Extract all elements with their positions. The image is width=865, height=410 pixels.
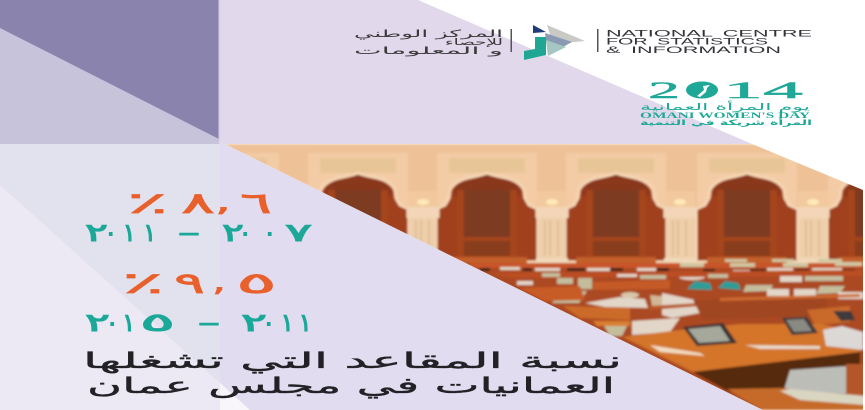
lower desk [727,388,865,410]
Omani Women's Day 2014 badge: يوم المرأة العمانية [640,100,811,113]
logo: Arabic organisation name: و المعلومات [354,46,503,57]
years: 2007 to 2011: ٠ [104,218,117,247]
caption: نسبة المقاعد التي تشغلها [83,349,622,374]
wall [225,144,832,259]
Omani Women's Day 2014 badge [640,78,812,127]
years: 2011 to 2015: ٠ [106,308,119,337]
icon: centre logo mark [524,25,585,60]
statistic: 2007-2011 [85,185,312,247]
front right member [823,326,863,350]
value: 9.5 percent: ٩ [174,266,205,300]
Omani Women's Day 2014 badge: OMANI WOMEN'S DAY [640,111,810,120]
years: 2011 to 2015: – [198,308,220,337]
logo: Arabic organisation name: المركز الوطني [354,29,503,40]
years: 2011 to 2015: ١ [298,308,312,337]
chamber floor and desks [462,257,863,410]
Omani Women's Day 2014 badge: المرأة شريكة في التنمية [640,117,812,127]
pillars [404,196,832,264]
years: 2007 to 2011: ٠ [238,218,252,247]
Omani Women's Day 2014 badge: 14 [723,78,805,103]
value: 9.5 percent: ٪ [122,266,164,300]
years: 2011 to 2015: ٠ [262,308,275,337]
logo: Arabic organisation name [354,29,503,57]
icon: year zero emblem [686,82,718,98]
value: 8.6 percent: ٦ [240,186,272,220]
value: 8.6 percent: ٨ [181,186,215,220]
logo: English organisation name [597,28,812,56]
carved desk front [692,298,826,319]
years: 2011 to 2015 [85,308,312,337]
Omani Women's Day 2014 badge: 2 [648,78,680,103]
value: 9.5 percent: ٥ [236,266,277,300]
caption: العمانيات في مجلس عمان [87,374,615,399]
value: 8.6 percent: , [215,185,231,218]
years: 2011 to 2015: ١ [280,308,294,337]
members in teal [687,281,712,290]
years: 2007 to 2011: ٢ [85,218,108,247]
years: 2011 to 2015: ٢ [85,308,110,337]
logo: English organisation name: FOR STATISTICS [606,36,768,48]
years: 2007 to 2011: ١ [122,218,136,247]
monitors [683,323,737,346]
caption [83,349,622,399]
years: 2007 to 2011: ١ [143,218,156,247]
years: 2007 to 2011: ٠ [263,218,276,247]
years: 2007 to 2011: ٢ [222,218,244,247]
seated person [784,366,848,394]
logo: English organisation name: NATIONAL CENTRE [606,28,812,40]
value: 9.5 percent [122,265,277,300]
years: 2007 to 2011 [85,218,312,247]
years: 2007 to 2011: ٧ [285,218,312,247]
years: 2011 to 2015: ٥ [140,308,175,337]
logo: Arabic organisation name: للإحصاء [445,38,503,48]
photo: parliament chamber [178,144,865,410]
years: 2007 to 2011: – [178,218,200,247]
value: 9.5 percent: , [212,265,226,298]
value: 8.6 percent [127,185,272,220]
value: 8.6 percent: ٪ [127,186,168,220]
logo: English organisation name: & INFORMATION [606,45,781,56]
arches [178,153,865,263]
years: 2011 to 2015: ١ [122,308,135,337]
years: 2011 to 2015: ٢ [241,308,267,337]
statistic: 2011-2015 [85,265,312,337]
